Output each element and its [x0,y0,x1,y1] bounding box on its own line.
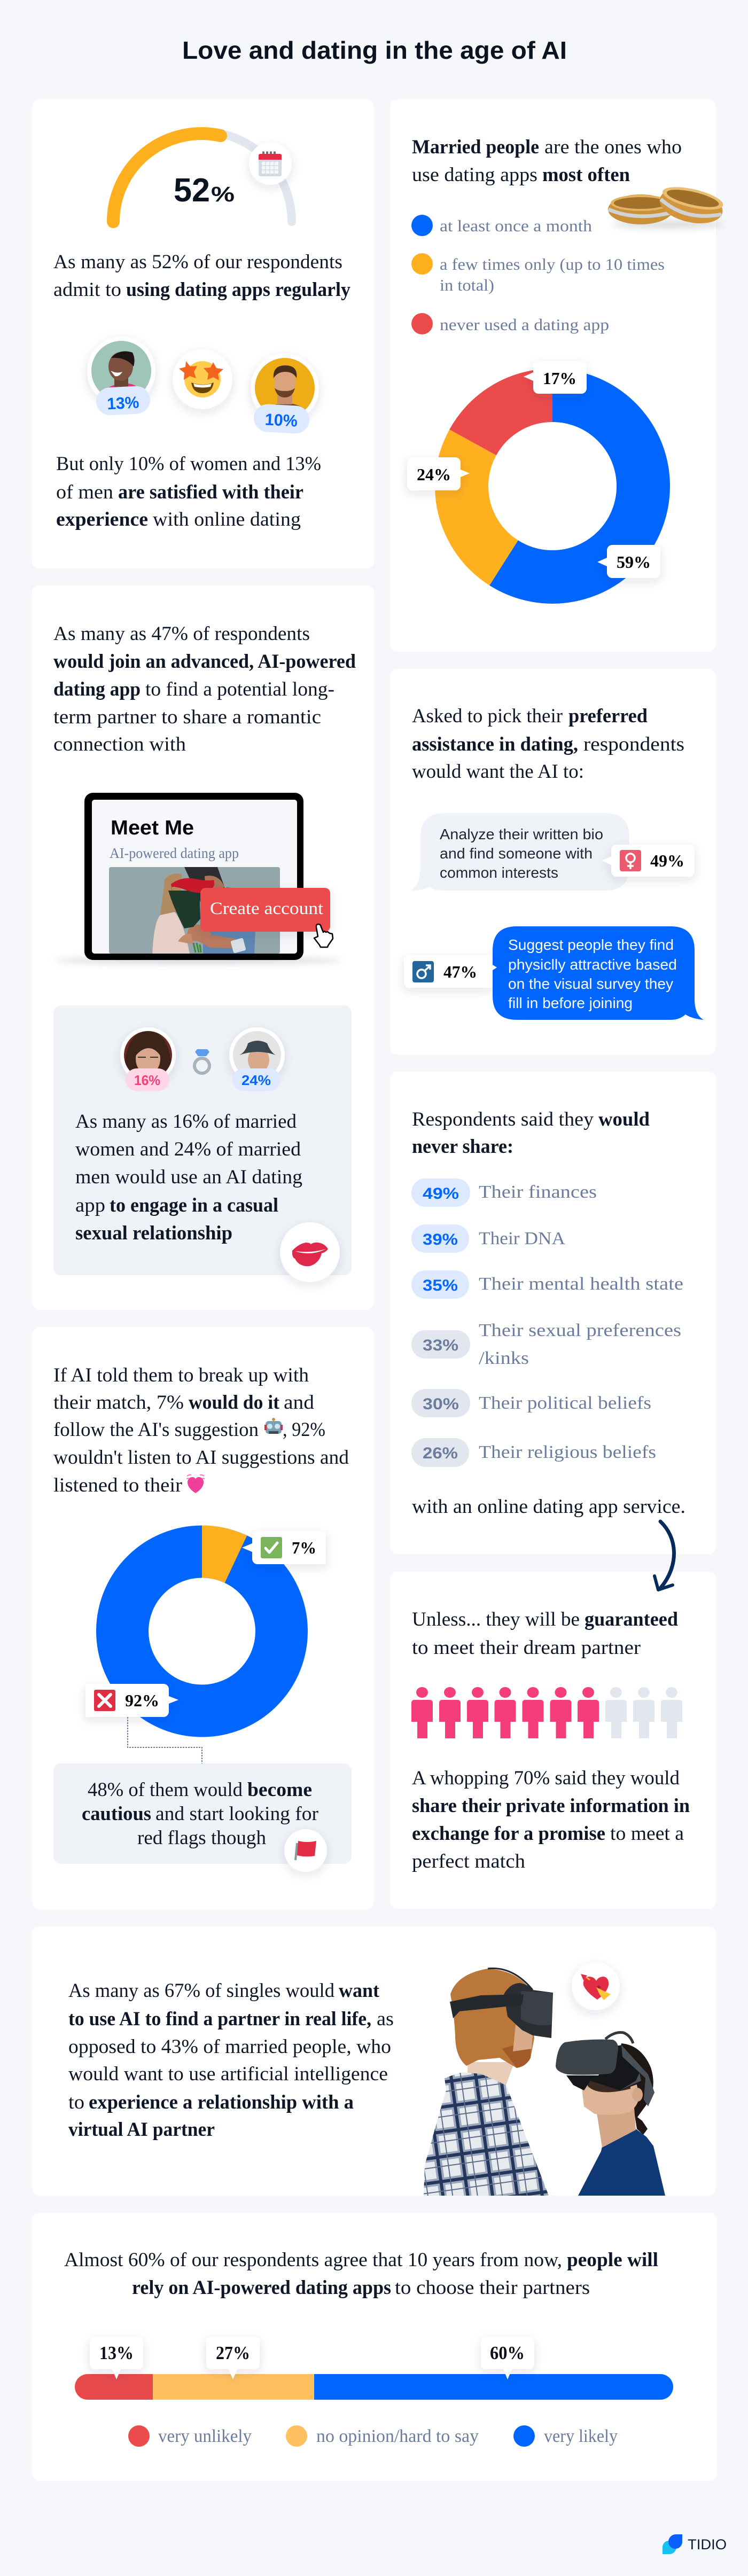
text: unless guaranteed: Unless... they will be [412,1609,580,1630]
legend: never used a dating app [440,315,609,334]
text: 67% singles: want [339,1980,380,2002]
list row: mental health [411,1270,683,1299]
label: 92%: 92% [125,1691,159,1710]
panel: AI-powered app [32,586,374,1310]
legend: very likely [544,2426,618,2446]
text: married casual: women and 24% of married [75,1138,301,1160]
list row: sexual preferences: 33% [423,1337,458,1354]
title: Love and dating in the age of AI [182,36,567,64]
label: 59% [597,545,660,578]
text: whopping 70%: to meet a [610,1823,684,1845]
label: 92% [85,1684,178,1717]
list row: finances: Their finances [479,1182,597,1202]
list row: finances [411,1178,597,1207]
text: unless guaranteed: guaranteed [585,1609,678,1630]
legend: very unlikely [158,2426,252,2446]
legend: no opinion/hard to say [316,2426,479,2446]
list row: political beliefs: 30% [423,1395,459,1413]
donut chart: app frequency [407,361,660,578]
text: preferred assistance: respondents [583,733,684,755]
text: satisfaction: of men [56,481,113,503]
text: married casual: As many as 16% of married [75,1111,297,1133]
text: preferred assistance: preferred [568,705,648,727]
gauge: 52%: 52 [174,172,210,209]
list row: sexual preferences: /kinks [479,1348,529,1368]
panel: dream partner [390,1572,716,1909]
text: 47% would join: to find a potential long- [145,678,334,700]
panel: would never share [390,1072,716,1554]
legend [128,2425,618,2447]
donut chart: follow AI [85,1531,326,1717]
list row: religious beliefs: Their religious beliefs [479,1442,656,1462]
bubble: analyze bio: common interests [440,864,558,881]
text: satisfaction: are satisfied with their [118,481,303,503]
label: 17% [524,361,587,394]
tablet mockup: AI-powered dating app [110,845,239,861]
photo: couple with roses [109,867,280,954]
list row: sexual preferences [411,1321,681,1368]
text: satisfaction: But only 10% of women and 13% [56,453,321,475]
text: 67% singles: to use AI to find a partner in real life, [68,2008,371,2030]
avatar: woman 13% [87,337,155,416]
panel: dating app usage [32,99,374,568]
icon: hand cursor [314,924,333,947]
text: with an online dating app service: with an online dating app service. [412,1496,685,1518]
label: 27% [206,2337,260,2379]
avatar: married woman 16%: 16% [134,1072,160,1088]
text: 47% would join: connection with [53,733,186,755]
text: preferred assistance: assistance in dating, [412,733,578,755]
icon: heart with arrow [572,1962,620,2010]
heading: never share: [412,1136,513,1158]
text: regular use [53,251,350,301]
icon: calendar [249,142,292,185]
bubble: analyze bio: Analyze their written bio [440,826,603,842]
list row: mental health: 35% [423,1277,458,1294]
bubble: suggest attractive: Suggest people they find [508,936,674,953]
arrow: connecting panels [654,1521,674,1590]
label: women 49% [602,845,695,877]
legend: a few times only (up to 10 times [440,255,665,274]
bubble: analyze bio [411,813,629,891]
heading: Respondents said they [412,1109,594,1130]
text: 47% would join: would join an advanced, AI-powered [53,651,356,673]
callout: red flags: become [247,1779,312,1801]
text: whopping 70%: share their private information in [412,1795,690,1817]
text: married casual: app [75,1195,105,1216]
label: 27%: 27% [216,2343,250,2363]
label: 7%: 7% [292,1538,316,1557]
button: create account: Create account [210,899,323,918]
logo: Tidio: TIDIO [688,2536,727,2552]
legend: in total) [440,276,494,294]
text: regular use: As many as 52% of our respondents [53,251,342,273]
text: 67% singles: would want to use artificial intelligence [68,2063,388,2085]
label: 60% [481,2337,534,2379]
heading: would [598,1109,650,1130]
text: 67% singles: to [68,2091,84,2113]
logo: Tidio [663,2534,727,2554]
callout: red flags: and start looking for [155,1803,318,1825]
text: 60% agree [64,2249,658,2299]
text: married casual: to engage in a casual [110,1195,278,1216]
text: satisfaction [56,453,321,530]
list row: DNA [411,1224,565,1253]
text: whopping 70%: A whopping 70% said they would [412,1767,680,1789]
text: break up: wouldn't listen to AI suggestions and [53,1447,349,1469]
text: 47% would join: As many as 47% of respondents [53,623,310,645]
list row: DNA: 39% [423,1231,458,1248]
icon: wedding rings [608,182,726,229]
text: married casual: men would use an AI dating [75,1166,302,1188]
text: 67% singles: virtual AI partner [68,2119,215,2141]
photo: woman with VR headset [556,2032,665,2196]
text: 47% would join: term partner to share a romantic [53,706,321,728]
text: 67% singles [68,1980,394,2141]
text: regular use: using dating apps regularly [126,279,350,301]
text: regular use: admit to [53,279,121,301]
text: preferred assistance: would want the AI to: [412,761,584,783]
text: unless guaranteed [412,1609,678,1659]
heading: Married people [412,136,539,158]
label: men 47%: 47% [443,962,477,981]
panel: married people [390,99,726,652]
icon: lips [280,1222,340,1282]
avatar: woman 13%: 13% [106,393,139,413]
heading [412,1109,650,1158]
tablet mockup [53,793,342,963]
callout: red flags [53,1763,352,1872]
text: married casual [75,1111,302,1244]
text: 67% singles: opposed to 43% of married people, who [68,2036,391,2058]
avatar: man 10%: 10% [264,410,298,431]
legend [411,215,665,334]
avatar: married man 24% [229,1027,285,1091]
text: 67% singles: experience a relationship with a [89,2091,354,2113]
list row: political beliefs: Their political beliefs [479,1393,651,1413]
bubble: suggest attractive: fill in before joining [508,995,633,1011]
label: 24% [407,457,470,490]
heading: are the ones who [544,136,682,158]
callout: red flags: red flags though [137,1827,266,1849]
text: 60% agree: to choose their partners [395,2277,590,2299]
label: 17%: 17% [543,369,576,388]
text: 67% singles: as [377,2008,394,2030]
label: 13% [90,2337,143,2379]
label: 60%: 60% [490,2343,525,2363]
list row: political beliefs [411,1389,651,1417]
text: preferred assistance: Asked to pick their [412,705,563,727]
legend: at least once a month [440,216,593,235]
avatar: man 10% [251,354,319,434]
text: satisfaction: experience [56,509,148,530]
label: 24%: 24% [417,465,451,484]
tablet mockup: Meet Me [111,817,194,839]
list row: religious beliefs [411,1438,656,1467]
text: 67% singles: As many as 67% of singles would [68,1980,334,2002]
button: create account [200,888,330,932]
gauge: 52%: % [211,183,235,206]
text: 60% agree: people will [567,2249,658,2271]
callout: red flags: cautious [82,1803,151,1825]
panel: preferred assistance [390,669,716,1055]
text: 47% would join: dating app [53,678,141,700]
list row: DNA: Their DNA [479,1229,565,1248]
bubble: suggest attractive [493,926,704,1020]
callout: red flags: 48% of them would [88,1779,243,1801]
text: break up: , 92% [283,1419,325,1441]
heading [412,136,682,186]
text: preferred assistance [412,705,684,783]
text: break up: follow the AI's suggestion [53,1419,259,1441]
list row: finances: 49% [423,1185,459,1203]
photo: man with VR headset [424,1968,553,2196]
text: 47% would join [53,623,356,755]
avatar: married woman 16% [120,1027,176,1091]
icon: red flag [284,1829,327,1872]
text: break up: would do it [189,1392,280,1414]
panel: singles vs married [32,1926,716,2196]
label: 59%: 59% [617,552,651,572]
icon: robot [264,1418,283,1434]
pictogram: 7 of 10 people [411,1687,682,1738]
gauge: 52% [111,131,292,222]
bubble: analyze bio: and find someone with [440,845,593,862]
text: whopping 70%: exchange for a promise [412,1823,605,1845]
avatar: married man 24%: 24% [241,1072,271,1088]
panel: married users callout [53,1005,352,1282]
list row: mental health: Their mental health state [479,1274,683,1294]
list row: religious beliefs: 26% [423,1445,458,1462]
text: break up: If AI told them to break up with [53,1364,309,1386]
icon: ring [194,1049,209,1073]
text: whopping 70%: perfect match [412,1851,526,1872]
bubble: suggest attractive: physiclly attractive based [508,956,677,973]
icon: pink heart [186,1475,205,1493]
text: 60% agree: rely on AI-powered dating apps [132,2277,391,2299]
icon: star eyes emoji [173,349,232,409]
text: whopping 70% [412,1767,690,1872]
heading: most often [542,164,630,186]
label: 7% [242,1531,326,1564]
text: break up: their match, 7% [53,1392,184,1414]
stacked bar chart [75,2337,673,2400]
label: men 47% [404,955,497,988]
panel: future of dating [32,2213,717,2481]
text: 60% agree: Almost 60% of our respondents agree that 10 years from now, [64,2249,562,2271]
panel: break up suggestion [32,1327,374,1909]
text: married casual: sexual relationship [75,1222,232,1244]
label: 13%: 13% [99,2343,134,2363]
heading: use dating apps [412,164,537,186]
bubble: suggest attractive: on the visual survey they [508,975,673,992]
label: women 49%: 49% [650,851,684,870]
text: satisfaction: with online dating [153,509,301,530]
text: break up: and [284,1392,315,1414]
list row: sexual preferences: Their sexual preferences [479,1321,681,1340]
text: unless guaranteed: to meet their dream partner [412,1637,641,1659]
text: break up [53,1364,349,1496]
text: break up: listened to their [53,1474,182,1496]
